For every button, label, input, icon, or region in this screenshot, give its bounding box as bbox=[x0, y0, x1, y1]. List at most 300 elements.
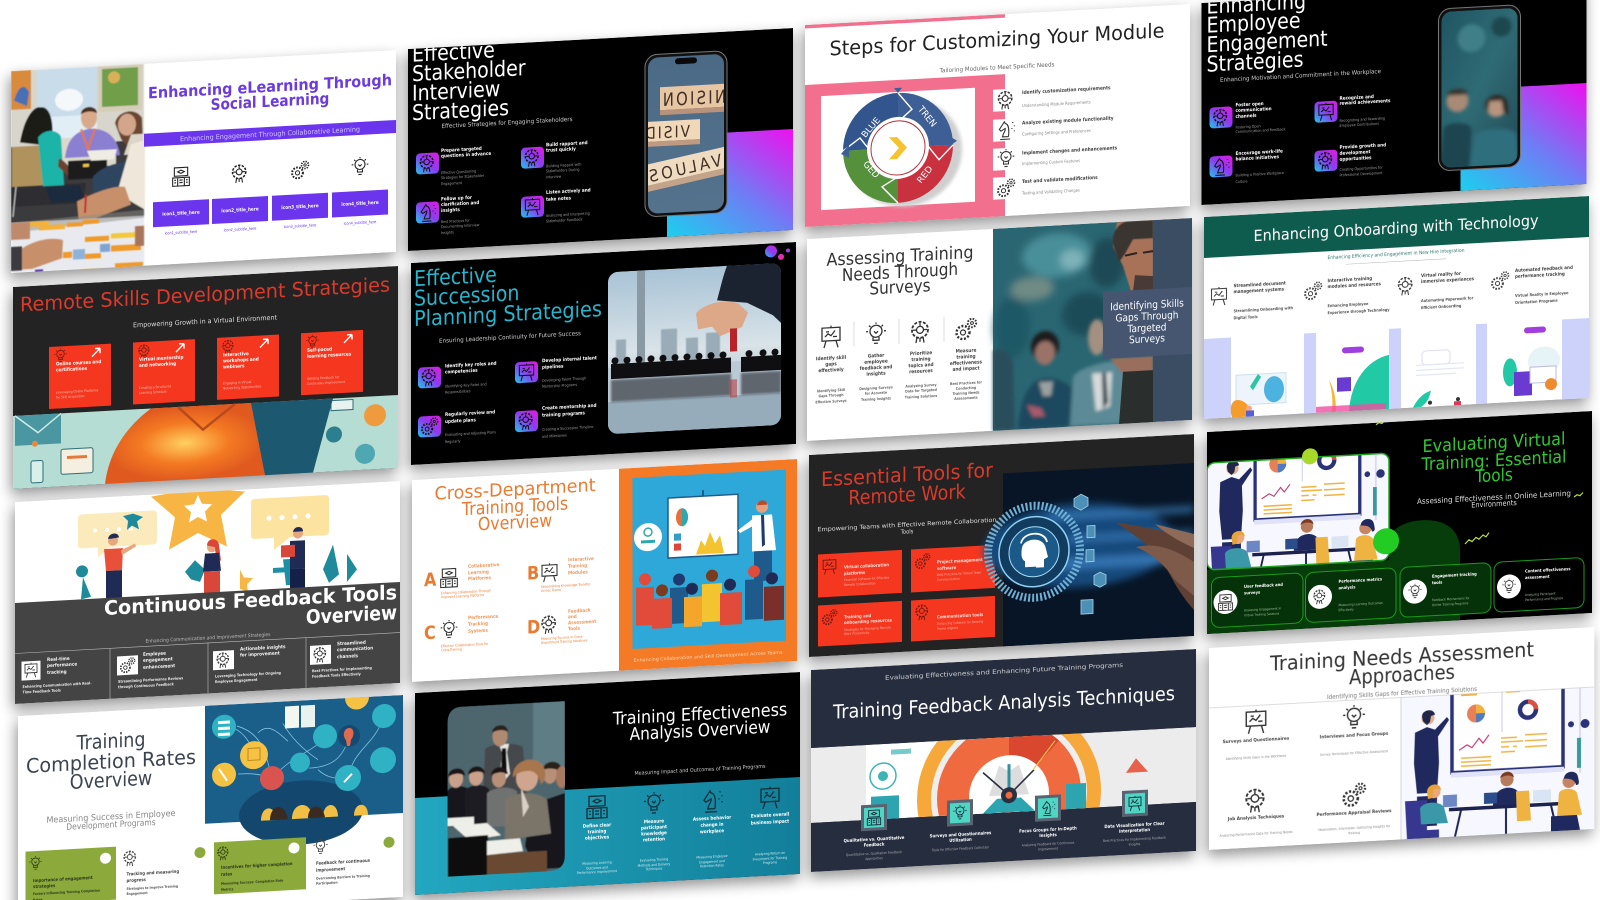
item: prepare targeted questions: Strategies for Stakeholder bbox=[441, 174, 485, 180]
steps list: Implementing Custom Features bbox=[1022, 158, 1080, 166]
item B: B bbox=[527, 563, 539, 585]
header band and title: Enhancing Onboarding with Technology bbox=[1254, 212, 1539, 245]
item descriptions: Conducting bbox=[956, 386, 977, 391]
title: Approaches bbox=[1349, 659, 1455, 690]
item: growth and development: Professional Development bbox=[1340, 171, 1383, 178]
card: engagement tracking: tools bbox=[1432, 579, 1443, 585]
dark green glow region bbox=[1207, 518, 1460, 634]
item: growth and development: Provide growth and bbox=[1340, 142, 1386, 151]
title: Training Feedback Analysis Techniques bbox=[832, 683, 1175, 724]
card: incentives: rates bbox=[221, 871, 233, 877]
title: Engagement bbox=[1206, 25, 1328, 58]
card: training and onboarding bbox=[818, 601, 902, 647]
item titles: business impact bbox=[751, 818, 790, 827]
item: review plans bbox=[418, 409, 496, 446]
card: incentives: Metrics bbox=[221, 887, 234, 892]
panel: Training Needs Assessment Approaches bbox=[1209, 627, 1594, 850]
item titles: Qualitative vs. Quantitative bbox=[844, 835, 905, 843]
card: communication tools: Teams Aligned bbox=[936, 626, 958, 631]
item titles: management systems bbox=[1234, 286, 1284, 295]
card: user feedback bbox=[1212, 573, 1303, 628]
title: Cross-Department bbox=[435, 474, 596, 504]
card: project management bbox=[911, 545, 995, 592]
item descriptions: Analyzing Return on bbox=[755, 851, 785, 857]
item: surveys and questionnaires: Identifying Skills Gaps in the Workforce bbox=[1226, 754, 1286, 761]
item titles: training bbox=[588, 828, 606, 836]
item titles: feedback and bbox=[860, 364, 892, 372]
card: online courses bbox=[49, 344, 111, 409]
phone with wooden blocks: VALUOS bbox=[647, 150, 723, 186]
item titles: topics and bbox=[908, 362, 934, 369]
card: project management: Project management bbox=[937, 557, 983, 565]
title: Completion Rates bbox=[26, 747, 196, 778]
title: Needs Through bbox=[842, 259, 958, 285]
title: Analysis Overview bbox=[630, 717, 770, 745]
icon boxes bbox=[861, 790, 1148, 831]
card: virtual mentorship: Learning Schedule bbox=[139, 389, 167, 395]
item titles bbox=[844, 820, 1165, 849]
photo: hand placing figures bbox=[608, 263, 781, 434]
dark band with title: Continuous Feedback Tools bbox=[104, 582, 397, 620]
item descriptions: Gaps Through bbox=[818, 393, 844, 398]
card: incentives: Incentives for higher completion bbox=[221, 861, 293, 870]
item: mentorship programs bbox=[515, 403, 596, 440]
item titles: knowledge bbox=[641, 830, 667, 838]
item: work-life balance: balance initiatives bbox=[1236, 154, 1279, 163]
item C: Effective Collaboration Tools for bbox=[441, 642, 489, 648]
item titles: Insights bbox=[1039, 832, 1057, 838]
item D: Assessment bbox=[568, 619, 597, 627]
card: tracking progress: progress bbox=[126, 877, 146, 883]
card: incentives: Measuring Success: Completion Rate bbox=[221, 878, 284, 886]
subtitle bbox=[1328, 247, 1465, 265]
title: Overview bbox=[478, 509, 552, 535]
cell: actionable insights: Employee Engagement bbox=[215, 678, 258, 684]
card: performance metrics bbox=[1306, 568, 1396, 623]
subtitle: Assessing Effectiveness in Online Learning bbox=[1417, 488, 1571, 506]
item descriptions: Virtual Reality in Employee bbox=[1515, 291, 1569, 298]
item titles: Feedback bbox=[864, 841, 885, 848]
subtitle: Empowering Growth in a Virtual Environment bbox=[133, 314, 278, 330]
item titles: training bbox=[956, 353, 976, 361]
item: mentorship programs: Creating a Succession Timeline bbox=[542, 425, 593, 432]
item: performance appraisal: Training bbox=[1347, 831, 1360, 836]
item C: Performance bbox=[468, 613, 498, 621]
title: Interview bbox=[412, 76, 500, 106]
photo: vintage training room bbox=[447, 701, 568, 877]
card: interactive workshops: workshops and bbox=[223, 356, 259, 365]
steps list: Test and validate modifications bbox=[1022, 175, 1098, 185]
item A: Improved Learning Platforms bbox=[441, 593, 484, 599]
accent circles bbox=[1302, 444, 1399, 559]
card: user feedback: Virtual Training Sessions bbox=[1244, 611, 1280, 618]
item: work-life balance: Encourage work-life bbox=[1236, 148, 1283, 157]
item: listen actively: Listen actively and bbox=[546, 187, 591, 196]
item D: Measuring Success in Cross- bbox=[541, 634, 583, 641]
card: training and onboarding: Work Productivity bbox=[844, 630, 870, 636]
decorative dots bbox=[765, 244, 790, 261]
subtitle: Identifying Skills Gaps for Effective Training Solutions bbox=[1327, 687, 1477, 701]
item D: Feedback bbox=[568, 607, 591, 615]
cell: real-time tracking: Enhancing Communication with Real- bbox=[22, 681, 92, 689]
item D: and bbox=[568, 614, 577, 621]
item: follow up: Documenting Interview bbox=[441, 223, 480, 229]
item: prepare targeted questions: questions in advance bbox=[441, 151, 491, 160]
subtitle: Evaluating Effectiveness and Enhancing Future Training Programs bbox=[885, 663, 1123, 682]
cell: streamlined communication: Best Practices for Implementing bbox=[312, 666, 372, 673]
subtitle: Development Programs bbox=[66, 816, 156, 832]
dark band with title bbox=[15, 582, 400, 704]
icon title cards: icon1_title_here bbox=[162, 209, 200, 218]
item B: Interactive bbox=[568, 556, 594, 564]
item titles: immersive experiences bbox=[1421, 276, 1474, 285]
item titles: Define clear bbox=[583, 822, 612, 830]
item descriptions: Efficient Onboarding bbox=[1421, 304, 1462, 310]
card: performance metrics: Effectively bbox=[1338, 607, 1354, 612]
item D bbox=[527, 607, 597, 646]
item descriptions bbox=[577, 850, 787, 875]
card: training and onboarding: Strategies for Managing Remote bbox=[844, 625, 891, 632]
subtitle: Measuring Impact and Outcomes of Training Programs bbox=[634, 764, 766, 777]
item: talent pipelines: Develop internal talent bbox=[542, 355, 598, 364]
icons bbox=[1212, 271, 1508, 306]
panel: Essential Tools for Remote Work bbox=[809, 434, 1194, 657]
card: engagement tracking: Engagement tracking bbox=[1432, 571, 1477, 579]
subtitle bar bbox=[144, 120, 396, 147]
item: foster open communication: communication bbox=[1236, 106, 1272, 114]
card: feedback for improvement: Overcoming Barriers to Training bbox=[316, 874, 371, 881]
item: job analysis: Job Analysis Techniques bbox=[1227, 813, 1284, 823]
item: surveys and questionnaires: Surveys and Questionnaires bbox=[1223, 735, 1290, 745]
item: interviews and focus groups bbox=[1320, 703, 1389, 757]
item descriptions: Measuring Employee bbox=[696, 854, 728, 860]
card: content effectiveness bbox=[1494, 557, 1584, 612]
title: Social Learning bbox=[211, 90, 329, 114]
icon title cards: icon3_title_here bbox=[281, 203, 319, 211]
item titles: objectives bbox=[585, 834, 609, 842]
item descriptions bbox=[815, 380, 982, 409]
panel: Cross-Department Training Tools Overview bbox=[412, 459, 797, 682]
card: feedback for improvement: Feedback for continuous bbox=[316, 858, 371, 866]
item: mentorship programs: training programs bbox=[542, 410, 585, 419]
card: virtual collaboration bbox=[818, 550, 902, 598]
item titles: Measure bbox=[644, 818, 664, 826]
item descriptions: Evaluating Training bbox=[640, 857, 668, 863]
pink panel with cycle diagram: TREN bbox=[915, 104, 938, 130]
title: Succession bbox=[414, 280, 519, 311]
icon title cards: icon4_title_here bbox=[341, 200, 379, 208]
title bbox=[414, 256, 602, 332]
item titles: effectiveness bbox=[950, 359, 982, 367]
item descriptions: Assessments bbox=[954, 395, 978, 401]
item descriptions: Training Needs bbox=[953, 390, 979, 396]
card: online courses: Leveraging Online Platforms bbox=[56, 388, 99, 395]
item: interviews and focus groups: Interviews and Focus Groups bbox=[1320, 730, 1389, 740]
card: content effectiveness: assessment bbox=[1525, 574, 1550, 580]
item: listen actively: take notes bbox=[546, 195, 571, 203]
item descriptions: Designing Surveys bbox=[859, 385, 893, 391]
steps list: Configuring Settings and Preferences bbox=[1022, 128, 1091, 137]
steps list bbox=[993, 83, 1117, 200]
card: interactive workshops: webinars bbox=[223, 363, 245, 371]
cell: real-time tracking: performance bbox=[47, 661, 77, 669]
title: Planning Strategies bbox=[414, 296, 602, 332]
card: virtual mentorship: Creating a Structured bbox=[139, 384, 171, 390]
subtitle bar: Enhancing Engagement Through Collaborative Learning bbox=[180, 125, 360, 143]
item: growth and development: opportunities bbox=[1340, 155, 1372, 163]
orange panel with presentation illustration: Enhancing Collaboration and Skill Development Across Teams bbox=[634, 649, 783, 664]
callout box: Gaps Through bbox=[1116, 310, 1178, 325]
title: Employee bbox=[1206, 7, 1301, 38]
item A: A bbox=[424, 570, 437, 592]
title: Tools bbox=[1474, 464, 1513, 487]
subtitle: Tools bbox=[900, 529, 913, 536]
item: talent pipelines: pipelines bbox=[542, 363, 564, 371]
item: key roles: Identifying Key Roles and bbox=[445, 382, 487, 389]
title: Steps for Customizing Your Module bbox=[830, 20, 1165, 61]
cell: employee engagement: Employee bbox=[143, 650, 166, 658]
squiggle accents bbox=[1376, 408, 1583, 549]
item A: Collaborative bbox=[468, 562, 499, 570]
title: Training bbox=[76, 729, 146, 755]
icon title cards: icon2_title_here bbox=[221, 206, 259, 215]
title bbox=[413, 45, 526, 122]
orange panel with presentation illustration bbox=[619, 459, 797, 671]
pink panel with cycle diagram: BLUE bbox=[860, 116, 883, 140]
panel: Training Effectiveness Analysis Overview bbox=[415, 672, 800, 895]
subtitle: Environments bbox=[1471, 498, 1517, 510]
photo: classroom group bbox=[11, 64, 145, 279]
title bbox=[434, 474, 596, 537]
item: review plans: Regularly bbox=[445, 439, 460, 444]
card: self-paced learning: Utilizing Feedback for bbox=[307, 375, 340, 381]
item: talent pipelines: Developing Talent Through bbox=[542, 376, 586, 383]
subtitle: Empowering Teams with Effective Remote Collaboration bbox=[818, 517, 997, 534]
subtitle: Enhancing Communication and Improvement Strategies bbox=[145, 632, 271, 645]
card: virtual mentorship: Virtual mentorship bbox=[139, 354, 184, 363]
item D: Department Training Initiatives bbox=[541, 638, 588, 645]
card: engagement tracking bbox=[1400, 563, 1491, 617]
item titles: effectively bbox=[818, 367, 844, 374]
item descriptions: Insights bbox=[1129, 842, 1141, 847]
cell: streamlined communication: Streamlined bbox=[337, 640, 366, 647]
card: self-paced learning: learning resources bbox=[307, 351, 352, 360]
card: user feedback: Assessing Engagement in bbox=[1244, 606, 1281, 613]
item: build rapport: trust quickly bbox=[546, 146, 576, 154]
item: key roles bbox=[418, 360, 497, 396]
item: review plans: Evaluating and Adjusting Plans bbox=[445, 430, 496, 437]
item descriptions: Digital Tools bbox=[1234, 315, 1258, 320]
item descriptions bbox=[846, 835, 1166, 862]
title: Assessing Training bbox=[826, 242, 973, 270]
card: engagement tracking: Feedback Mechanisms for bbox=[1432, 596, 1470, 602]
card: performance metrics: Performance metrics bbox=[1338, 576, 1383, 584]
panel: Enhancing Employee Engagement Strategies bbox=[1202, 0, 1586, 205]
item descriptions: Programs bbox=[763, 860, 777, 865]
subtitle bbox=[1417, 488, 1571, 513]
steps list: Understanding Module Requirements bbox=[1022, 99, 1091, 108]
item: build rapport: Stakeholders During bbox=[546, 167, 580, 174]
dark band with title: Overview bbox=[306, 602, 397, 629]
item: prepare targeted questions: Engagement bbox=[441, 181, 463, 186]
panel: Assessing Training Needs Through Surveys bbox=[807, 218, 1192, 441]
card: online courses: Online courses and bbox=[56, 359, 101, 368]
item descriptions: Best Practices for Implementing Feedback bbox=[1103, 835, 1166, 843]
photo: blurred team portrait bbox=[993, 218, 1192, 431]
card: training and onboarding: Training and bbox=[844, 613, 871, 620]
card: engagement tracking: Online Training Programs bbox=[1432, 601, 1469, 607]
icon subtitles: icon1_subtitle_here bbox=[165, 230, 198, 236]
panel: Training Feedback Analysis Techniques bbox=[811, 649, 1196, 898]
header band and title bbox=[1204, 196, 1589, 258]
item titles: retention bbox=[643, 836, 665, 844]
item: talent pipelines bbox=[515, 355, 598, 390]
panel: Training Completion Rates Overview bbox=[18, 683, 403, 900]
item: work-life balance bbox=[1210, 148, 1284, 186]
item: performance appraisal bbox=[1316, 782, 1392, 837]
title: Strategies bbox=[1206, 46, 1303, 77]
item titles: Identify skill bbox=[816, 354, 846, 363]
card: interactive workshops: Engaging in Virtual bbox=[223, 380, 251, 386]
grid lines bbox=[15, 633, 400, 704]
title: Remote Skills Development Strategies bbox=[20, 274, 390, 317]
item: job analysis: Analyzing Performance Data for Training Needs bbox=[1220, 830, 1293, 838]
item: listen actively: Stakeholder Feedback bbox=[546, 217, 583, 224]
item: growth and development: Creating Opportunities for bbox=[1340, 165, 1383, 172]
item titles bbox=[816, 347, 982, 381]
title: Training Tools bbox=[461, 492, 568, 520]
illustration strip bbox=[1204, 318, 1589, 419]
item: mentorship programs: and Milestones bbox=[542, 433, 567, 439]
item descriptions bbox=[1234, 291, 1569, 320]
item: build rapport: Building Rapport with bbox=[546, 162, 582, 169]
item descriptions: Techniques bbox=[645, 866, 663, 872]
item titles: gaps bbox=[825, 362, 837, 368]
cell: employee engagement: through Continuous Feedback bbox=[118, 682, 174, 689]
card: feedback for improvement: Participation bbox=[316, 880, 338, 886]
item titles: Evaluate overall bbox=[751, 811, 790, 820]
subtitle: Effective Strategies for Engaging Stakeholders bbox=[442, 117, 573, 130]
title bbox=[26, 726, 196, 797]
item descriptions: Measuring Learning bbox=[582, 860, 612, 866]
item: foster open communication: Foster open bbox=[1236, 101, 1264, 109]
item: foster open communication: Fostering Open bbox=[1236, 124, 1261, 130]
illustration: person with digital icons bbox=[13, 395, 398, 489]
item: interviews and focus groups: Survey Techniques for Effective Assessment bbox=[1320, 749, 1389, 757]
steps list: Analyze existing module functionality bbox=[1022, 115, 1114, 127]
cell: actionable insights: for improvement bbox=[240, 650, 281, 659]
title: Surveys bbox=[869, 275, 931, 299]
title: Training: Essential bbox=[1421, 446, 1566, 475]
icon subtitles: icon3_subtitle_here bbox=[284, 223, 317, 229]
item titles: and impact bbox=[952, 365, 980, 373]
card: feedback for improvement bbox=[313, 834, 394, 886]
title bbox=[1206, 0, 1328, 77]
title: Strategies bbox=[412, 95, 509, 126]
title: Stakeholder bbox=[412, 55, 526, 87]
title bbox=[612, 699, 787, 745]
item: job analysis bbox=[1220, 788, 1293, 838]
item: talent pipelines: Mentorship Programs bbox=[542, 383, 577, 389]
card: performance metrics: Measuring Learning Outcomes bbox=[1338, 601, 1383, 607]
card: tracking progress: Engagement bbox=[126, 891, 148, 896]
item titles: modules and resources bbox=[1327, 281, 1381, 290]
photo: digital interface and hand bbox=[984, 463, 1194, 647]
title: Enhancing eLearning Through bbox=[148, 71, 392, 103]
item descriptions: Retention Rates bbox=[700, 863, 724, 868]
subtitle: Ensuring Leadership Continuity for Future Success bbox=[439, 331, 581, 345]
item descriptions: Identifying Skill bbox=[817, 388, 845, 394]
item titles: participant bbox=[641, 824, 668, 832]
item descriptions: Analyzing Feedback for Continuous bbox=[1022, 840, 1075, 848]
subtitle: Measuring Success in Employee bbox=[46, 807, 175, 825]
item descriptions: Data for Targeted bbox=[905, 388, 937, 394]
item descriptions: Analyzing Survey bbox=[905, 383, 937, 389]
item B: Streamlining Knowledge Transfer bbox=[541, 582, 591, 589]
panel: Remote Skills Development Strategies bbox=[13, 266, 398, 489]
card: project management: software bbox=[937, 565, 956, 571]
card: incentives bbox=[214, 837, 306, 894]
item titles: workplace bbox=[700, 828, 724, 835]
title: Effective bbox=[414, 262, 497, 292]
pink panel with cycle diagram: RED bbox=[916, 165, 935, 186]
item: performance appraisal: Performance Appraisal Reviews bbox=[1316, 808, 1392, 818]
illustration: gauge dashboard bbox=[811, 693, 1196, 898]
item D: D bbox=[527, 617, 540, 639]
item titles: change in bbox=[700, 821, 724, 829]
item descriptions: Best Practices for bbox=[950, 380, 982, 386]
subtitle: Enhancing Efficiency and Engagement in New Hire Integration bbox=[1328, 247, 1465, 261]
item: recognize and reward: Employee Contributions bbox=[1340, 122, 1379, 128]
cell: real-time tracking bbox=[22, 654, 92, 695]
title bbox=[821, 460, 993, 512]
item B bbox=[527, 556, 594, 594]
panel: Effective Stakeholder Interview Strategies bbox=[408, 21, 793, 251]
item titles bbox=[583, 811, 790, 847]
item: review plans: Regularly review and bbox=[445, 409, 495, 418]
panel: Evaluating Virtual Training: Essential Tools bbox=[1207, 407, 1592, 634]
teal band bbox=[415, 777, 800, 895]
item titles: Surveys and Questionnaires bbox=[930, 830, 992, 839]
subtitle: Tailoring Modules to Meet Specific Needs bbox=[938, 62, 1055, 75]
illustration: connected learning bbox=[205, 683, 403, 850]
cell: streamlined communication bbox=[310, 639, 373, 679]
card: tracking progress: Tracking and measuring bbox=[126, 868, 179, 877]
item: recognize and reward: Recognizing and Rewarding bbox=[1340, 116, 1385, 123]
item descriptions: for Accurate bbox=[865, 390, 888, 396]
title: Remote Work bbox=[848, 481, 966, 510]
item titles: Interpretation bbox=[1119, 827, 1150, 834]
item: foster open communication: channels bbox=[1236, 113, 1257, 120]
item titles: Assess behavior bbox=[693, 814, 732, 823]
item titles bbox=[1234, 265, 1573, 295]
card: engagement strategies: Factors Influencing Training Completion bbox=[33, 888, 101, 896]
title: Overview bbox=[70, 768, 152, 794]
card: virtual collaboration: Remote Collaboration bbox=[844, 581, 875, 587]
item: work-life balance: Building a Positive Workplace bbox=[1236, 171, 1284, 178]
item C: Tracking bbox=[468, 621, 488, 628]
card: user feedback: User feedback and bbox=[1244, 582, 1283, 589]
item: growth and development: development bbox=[1340, 149, 1371, 157]
item titles: Prioritize bbox=[910, 350, 932, 357]
title: Essential Tools for bbox=[821, 460, 993, 492]
item titles: Utilization bbox=[949, 836, 972, 843]
item titles: performance tracking bbox=[1515, 271, 1565, 280]
callout box: Identifying Skills bbox=[1110, 298, 1184, 314]
callout box bbox=[1103, 287, 1192, 359]
item C: Cross-Training bbox=[441, 647, 462, 652]
item descriptions: Investment for Training bbox=[753, 855, 787, 862]
